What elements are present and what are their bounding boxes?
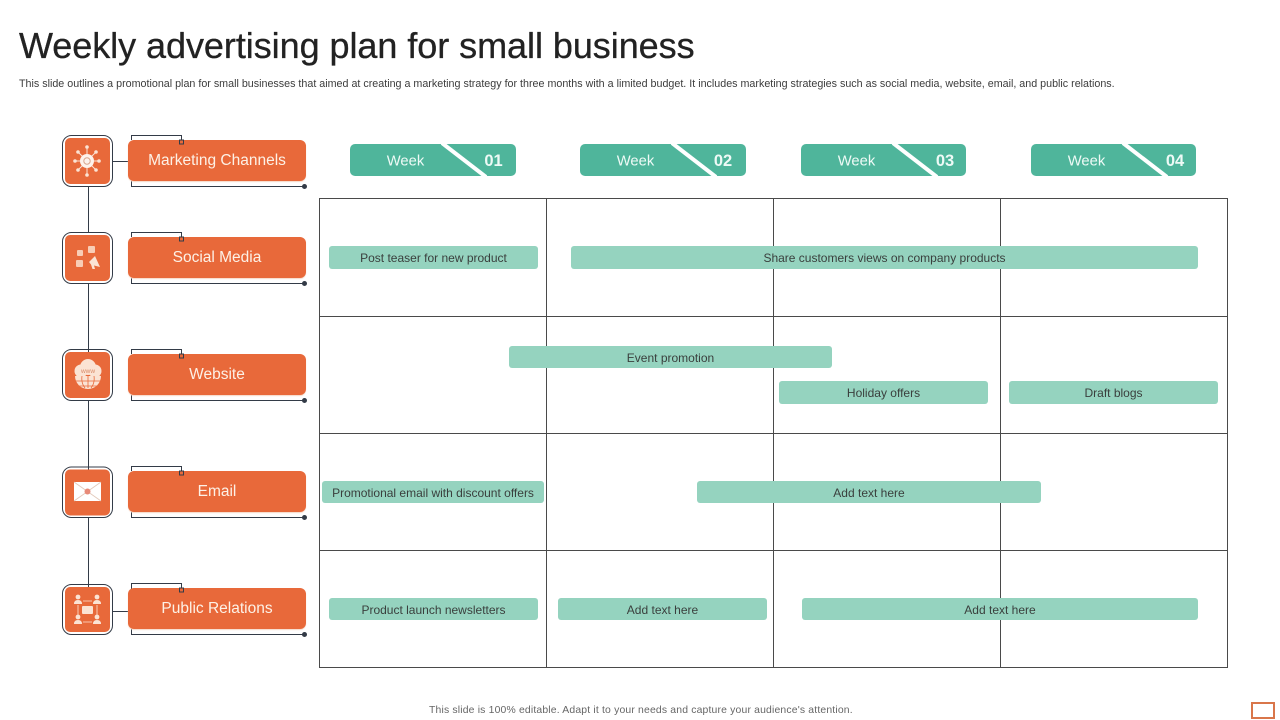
category: Website: Website bbox=[189, 366, 245, 383]
week 03 header: Week bbox=[838, 154, 876, 170]
task bar bbox=[1009, 381, 1218, 404]
task bar: Holiday offers bbox=[847, 386, 920, 400]
category: Public Relations bbox=[128, 588, 306, 629]
category: Marketing Channels bbox=[128, 140, 306, 181]
task bar: Share customers views on company products bbox=[763, 251, 1006, 265]
task bar bbox=[329, 246, 538, 269]
week 01 header: Week bbox=[387, 154, 425, 170]
week 04 header: Week bbox=[1068, 154, 1106, 170]
week 01 header: 01 bbox=[484, 152, 503, 170]
week 03 header bbox=[801, 144, 966, 176]
icon tile: Social Media bbox=[62, 232, 113, 284]
task bar bbox=[571, 246, 1198, 269]
week 04 header: 04 bbox=[1166, 152, 1185, 170]
icon tile: Website bbox=[62, 349, 113, 401]
task bar bbox=[697, 481, 1041, 503]
task bar bbox=[802, 598, 1198, 620]
task bar: Event promotion bbox=[627, 351, 714, 365]
task bar: Add text here bbox=[833, 486, 905, 500]
task bar bbox=[322, 481, 544, 503]
corner logo box bbox=[1251, 702, 1275, 719]
category: Public Relations: Public Relations bbox=[161, 600, 273, 617]
category: Social Media: Social Media bbox=[173, 249, 261, 266]
task bar bbox=[558, 598, 767, 620]
task bar bbox=[329, 598, 538, 620]
week 02 header: Week bbox=[617, 154, 655, 170]
week 03 header: 03 bbox=[936, 152, 954, 170]
left connectors bbox=[88, 135, 302, 635]
schedule grid bbox=[319, 198, 1228, 668]
task bar: Add text here bbox=[627, 603, 698, 617]
icon tile: Marketing Channels bbox=[62, 135, 113, 187]
week 01 header bbox=[350, 144, 516, 176]
category: Marketing Channels: Marketing Channels bbox=[148, 152, 286, 169]
week 02 header: 02 bbox=[714, 152, 732, 170]
footer note: This slide is 100% editable. Adapt it to your needs and capture your audience's attention. bbox=[429, 705, 853, 716]
task bar: Post teaser for new product bbox=[360, 251, 507, 265]
task bar: Promotional email with discount offers bbox=[332, 486, 534, 500]
title: Weekly advertising plan for small business bbox=[19, 25, 695, 66]
icon tile: Email bbox=[62, 466, 113, 518]
icon tile: Public Relations bbox=[62, 584, 113, 635]
task bar: Draft blogs bbox=[1084, 386, 1143, 400]
task bar: Product launch newsletters bbox=[361, 603, 506, 617]
task bar bbox=[779, 381, 988, 404]
icon tile: Website: www bbox=[80, 368, 95, 375]
category: Website bbox=[128, 354, 306, 395]
subtitle description: This slide outlines a promotional plan for small businesses that aimed at creating a marketing strategy for three months with a limited budget. It includes marketing strategies such as social media, website, email, and public relations. bbox=[19, 78, 1115, 90]
task bar: Add text here bbox=[964, 603, 1036, 617]
category: Social Media bbox=[128, 237, 306, 278]
bracket markers bbox=[179, 140, 307, 637]
week 02 header bbox=[580, 144, 746, 176]
category: Email bbox=[128, 471, 306, 512]
category: Email: Email bbox=[198, 483, 236, 500]
task bar bbox=[509, 346, 832, 368]
week 04 header bbox=[1031, 144, 1196, 176]
